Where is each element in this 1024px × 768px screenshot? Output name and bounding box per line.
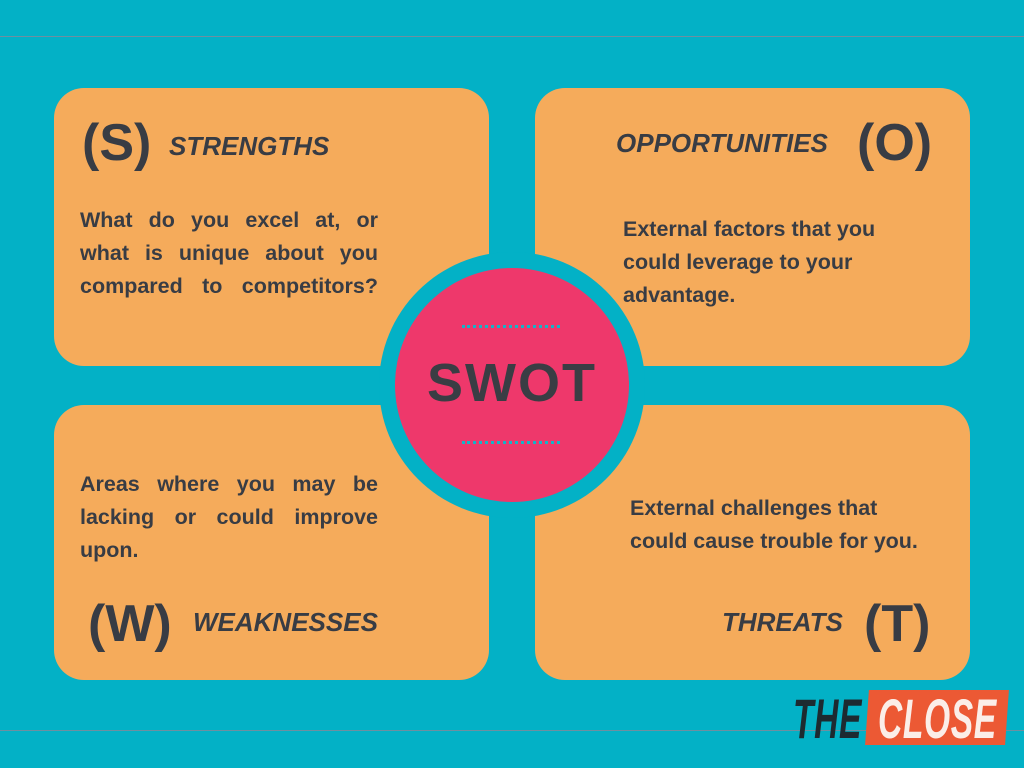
text: opportunities: advantage. <box>623 283 735 307</box>
text: weaknesses: upon. <box>80 538 139 562</box>
text: strengths <box>80 208 378 298</box>
text: strengths: what is unique about you <box>80 241 378 265</box>
panel: opportunities <box>535 88 970 366</box>
heading: weaknesses: WEAKNESSES <box>193 607 378 637</box>
heading: (O): (O) <box>857 114 932 172</box>
panel: strengths <box>54 88 489 366</box>
text: opportunities: External factors that you <box>623 217 875 241</box>
heading: opportunities: OPPORTUNITIES <box>616 128 828 158</box>
text: strengths: compared to competitors? <box>80 274 378 298</box>
panel: threats <box>535 405 970 680</box>
text: threats: could cause trouble for you. <box>630 529 918 553</box>
text: opportunities <box>623 217 875 307</box>
text: opportunities: could leverage to your <box>623 250 852 274</box>
text: weaknesses: lacking or could improve <box>80 505 378 529</box>
heading: (T): (T) <box>864 595 930 653</box>
logo: The Close: THE <box>793 687 862 750</box>
text: weaknesses: Areas where you may be <box>80 472 378 496</box>
heading: (W): (W) <box>88 595 172 653</box>
text: threats <box>630 496 918 553</box>
heading: threats: THREATS <box>722 607 843 637</box>
text: strengths: What do you excel at, or <box>80 208 378 232</box>
center: SWOT circle <box>380 254 644 516</box>
panel: weaknesses <box>54 405 489 680</box>
text: weaknesses <box>80 472 378 562</box>
logo: The Close: CLOSE <box>878 687 997 750</box>
heading: (S): (S) <box>82 114 151 172</box>
text: threats: External challenges that <box>630 496 877 520</box>
heading: strengths: STRENGTHS <box>169 131 329 161</box>
title: SWOT: SWOT <box>427 353 597 413</box>
logo: The Close <box>793 687 1009 750</box>
